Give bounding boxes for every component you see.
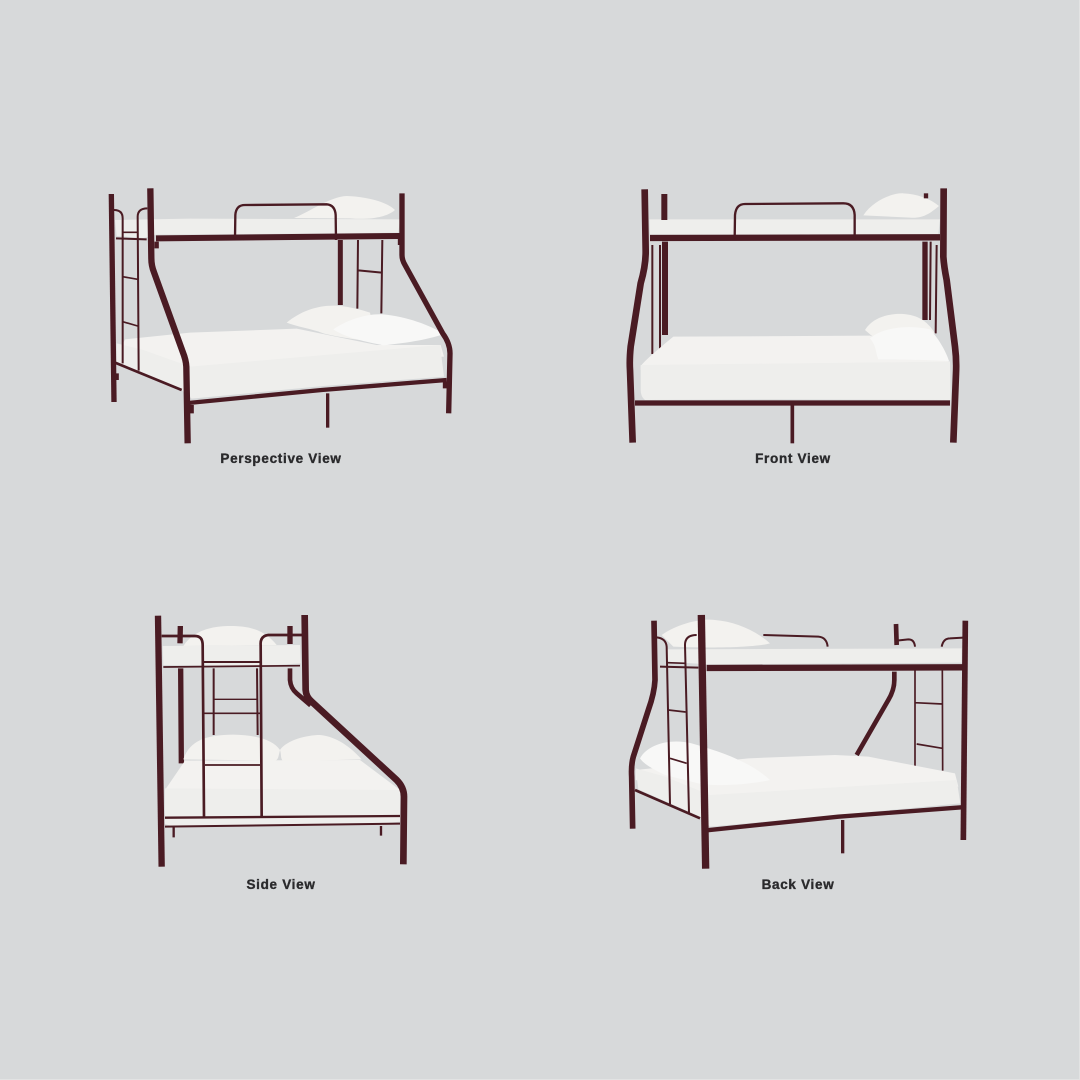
label: back view: Back View	[762, 877, 834, 892]
lower pillows	[287, 306, 444, 345]
back post and far ladder	[340, 240, 382, 313]
upper mattress	[163, 645, 301, 666]
upper mattress	[115, 219, 400, 238]
metal frame	[111, 188, 450, 443]
lower pillows	[865, 314, 949, 361]
metal frame	[632, 615, 965, 869]
label: perspective view: Perspective View	[220, 451, 342, 466]
illustration: bed perspective view	[111, 188, 450, 443]
label: side view: Side View	[246, 877, 316, 892]
panel: back view	[632, 615, 965, 892]
illustration: bed back view	[632, 615, 965, 869]
panel: front view	[630, 188, 956, 466]
lower mattress	[117, 329, 444, 399]
near ladder	[657, 635, 698, 813]
lower pillow	[640, 741, 770, 785]
ladder near side	[114, 208, 147, 371]
lower mattress	[641, 336, 951, 400]
metal frame and near ladder	[158, 615, 404, 867]
illustration: bed front view	[630, 188, 956, 443]
illustration: bed side view	[158, 615, 404, 867]
lower pillows	[183, 735, 362, 761]
panel: perspective view	[111, 188, 450, 466]
upper pillow	[183, 626, 277, 646]
metal frame	[630, 188, 956, 443]
lower mattress	[636, 755, 960, 827]
upper pillow	[863, 193, 939, 218]
lower mattress	[165, 760, 400, 827]
upper pillow	[662, 620, 770, 647]
back posts and far ladder	[180, 626, 311, 763]
far posts, diagonal and far ladder	[763, 624, 963, 771]
back posts and far ladder	[652, 193, 937, 354]
label: front view: Front View	[755, 451, 831, 466]
panel: side view	[158, 615, 404, 892]
upper pillow	[294, 196, 395, 219]
upper mattress	[667, 648, 962, 664]
upper mattress	[649, 219, 940, 235]
